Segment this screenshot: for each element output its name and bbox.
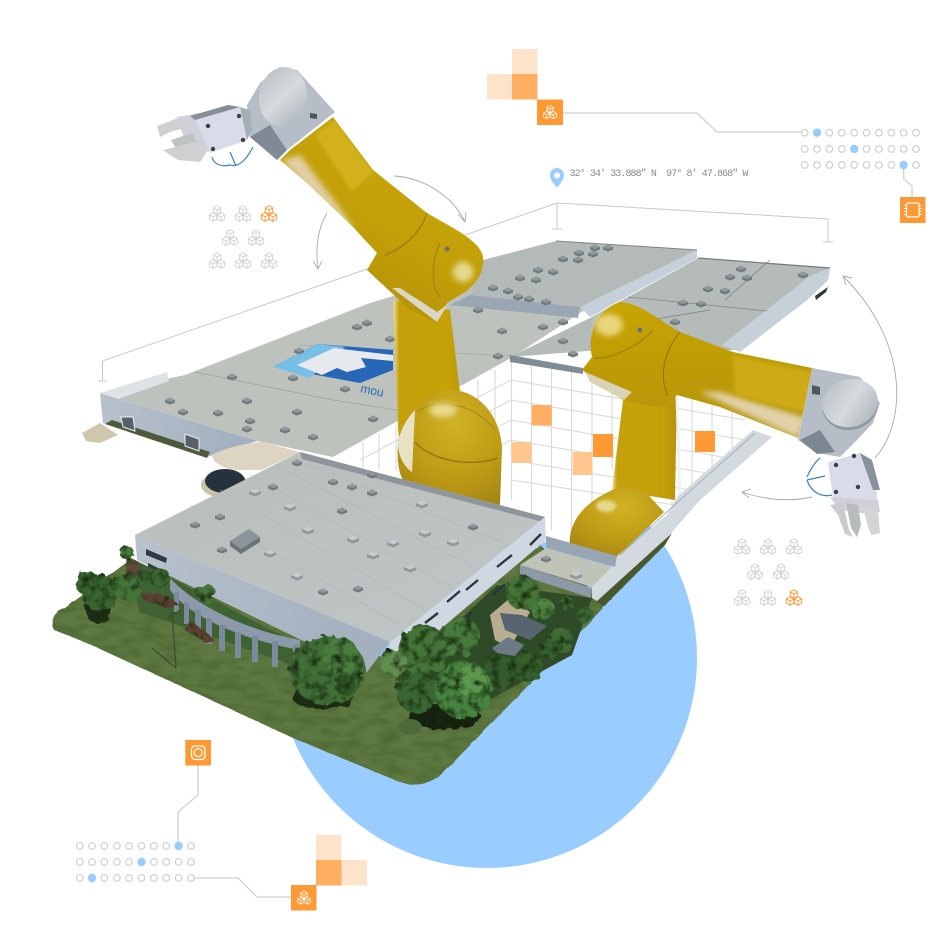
grid wall interior <box>333 360 760 550</box>
patio and pavilions <box>490 598 547 656</box>
low connecting wing <box>520 536 617 598</box>
robot arm B: gripper <box>807 453 880 537</box>
top orange squares <box>487 49 538 100</box>
robot arm B: wrist <box>798 368 884 457</box>
curved colonnade <box>170 578 300 667</box>
bottom leader lines and dot matrix <box>76 765 291 897</box>
icon: chip <box>900 197 926 223</box>
cube icons: upper left group <box>209 206 277 268</box>
front building <box>135 452 546 672</box>
robot arm B: upper arm <box>582 302 812 438</box>
dark planting bed behind right trees <box>395 585 592 705</box>
robot arm A: upper arm <box>280 117 484 323</box>
coordinates label: 32° 34' 33.888" N 97° 8' 47.868" W <box>570 168 748 180</box>
icon: location pin <box>550 168 564 188</box>
back building: rear roof blocks <box>450 241 830 374</box>
blue circle backdrop <box>277 448 697 868</box>
top leader lines and dot matrix <box>563 113 919 197</box>
rotation arrows <box>313 176 897 500</box>
round entrance canopy <box>201 442 300 498</box>
icon: cubes top <box>537 100 563 125</box>
shrub <box>398 719 422 735</box>
robot arm A: gripper <box>157 105 253 166</box>
trees: left cluster <box>75 546 215 642</box>
icon: cubes bottom <box>291 885 316 910</box>
robot arm B: column and base <box>570 392 680 556</box>
back building: left wing <box>82 270 600 458</box>
robot arm A: column and base <box>393 300 502 505</box>
roof units: back building <box>165 244 808 440</box>
site bracket <box>98 203 833 381</box>
trees: center tree <box>289 636 365 709</box>
side strip of right wing <box>592 430 772 606</box>
mouser logo on roof <box>273 344 393 400</box>
bottom orange squares <box>316 835 367 886</box>
trees: right cluster <box>380 576 593 729</box>
planting along the front wall <box>125 555 300 668</box>
mouser logo on roof: mou <box>359 381 385 400</box>
roof units: front building <box>190 460 478 596</box>
lawn <box>53 543 663 784</box>
icon: processor ring <box>185 740 211 766</box>
utility pole <box>152 610 180 668</box>
robot arm A: wrist <box>247 64 335 160</box>
cube icons: lower right group <box>734 539 802 605</box>
